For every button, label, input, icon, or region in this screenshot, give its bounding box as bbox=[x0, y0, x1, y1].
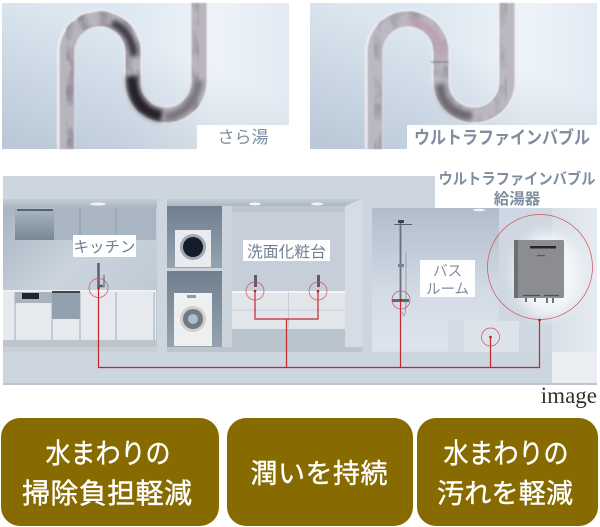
benefit box 3 bbox=[417, 418, 598, 526]
label: plain water bbox=[197, 125, 289, 149]
label: bathroom: バス bbox=[433, 264, 462, 280]
vanity cabinet bbox=[232, 292, 345, 329]
benefit box 3: 汚れを軽減 bbox=[437, 479, 573, 509]
benefit box 1: 掃除負担軽減 bbox=[22, 478, 192, 509]
benefit box 1: 水まわりの bbox=[46, 438, 170, 469]
pipe: dirty bbox=[66, 3, 199, 149]
label: plain water: さら湯 bbox=[218, 128, 268, 147]
photo: pipe with plain hot water bbox=[2, 3, 289, 149]
icon: water heater bbox=[514, 240, 564, 303]
panel: laundry and vanity bbox=[167, 199, 362, 352]
illustration: house cross-section bbox=[3, 176, 597, 385]
label: kitchen: キッチン bbox=[73, 239, 136, 256]
soft glow behind water heater bbox=[514, 233, 582, 317]
benefit box 1 bbox=[1, 418, 219, 526]
label: ultra fine bubble water heater bbox=[435, 165, 600, 208]
piping diagram: red lines and circles bbox=[89, 214, 592, 368]
benefit box 2 bbox=[227, 418, 413, 526]
label: bathroom: ルーム bbox=[426, 282, 469, 298]
label: vanity: 洗面化粧台 bbox=[247, 243, 326, 261]
icon: range hood bbox=[15, 209, 54, 240]
icon: vanity faucets bbox=[254, 275, 320, 287]
caption: image: image bbox=[541, 383, 597, 408]
panel: kitchen bbox=[3, 199, 157, 352]
benefit box 3: 水まわりの bbox=[444, 438, 568, 469]
pipe: clean bbox=[374, 3, 507, 149]
icon: bathtub bbox=[448, 320, 519, 352]
icon: shower bbox=[392, 220, 412, 315]
benefit box 2: 潤いを持続 bbox=[250, 459, 388, 489]
label: bathroom bbox=[420, 260, 475, 298]
icon: dishwasher bbox=[52, 292, 80, 319]
icon: dryer bbox=[175, 230, 211, 267]
label: ultra fine bubble water heater: 給湯器 bbox=[494, 190, 541, 208]
photo: pipe with ultra fine bubble bbox=[310, 3, 597, 149]
icon: oven bbox=[15, 292, 52, 303]
panel: bathroom bbox=[372, 208, 552, 352]
icon: washing machine bbox=[174, 293, 212, 346]
icon: kitchen faucet bbox=[98, 263, 105, 286]
